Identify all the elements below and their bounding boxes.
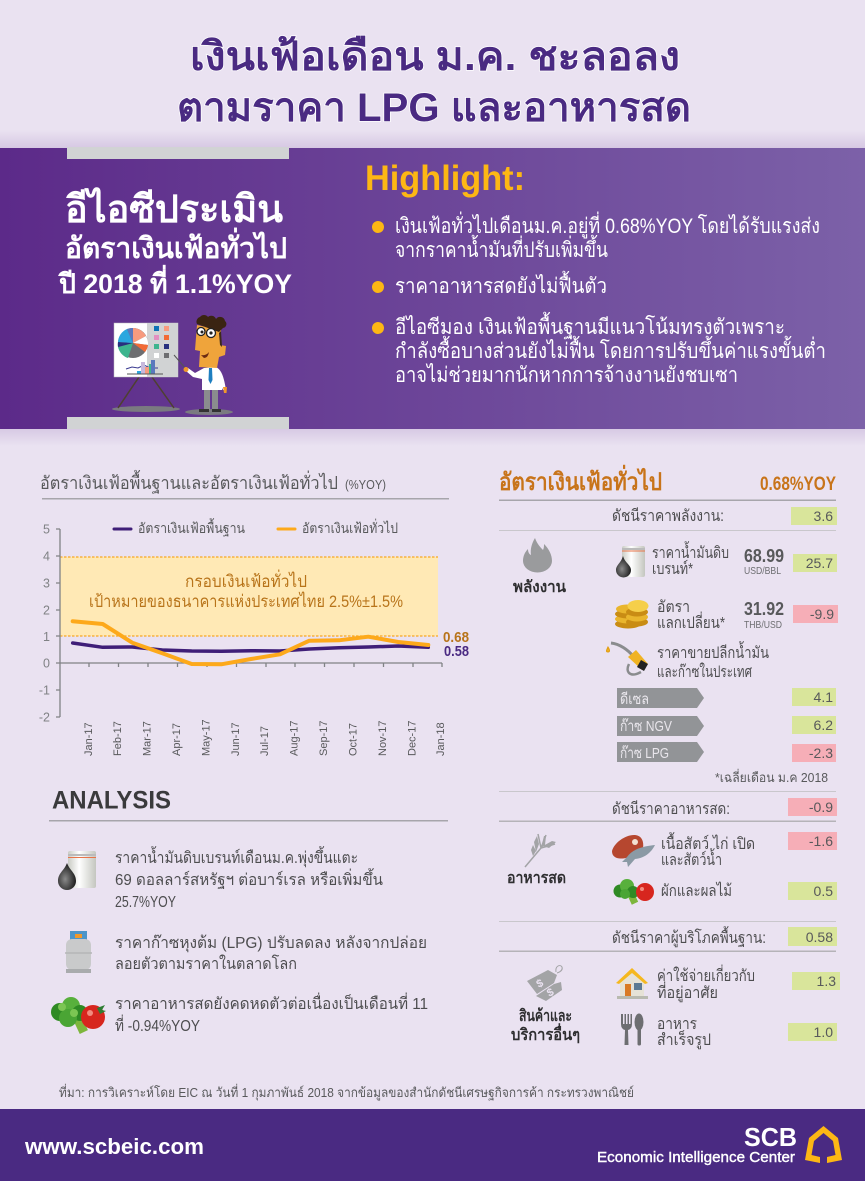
title: ตามราคา LPG และอาหารสด [177, 86, 691, 130]
row: exchange rate: THB/USD [744, 619, 782, 631]
row: prepared food: สำเร็จรูป [657, 1029, 711, 1050]
row: LPG: ก๊าซ LPG [620, 745, 669, 762]
source note: ที่มา: การวิเคราะห์โดย EIC ณ วันที่ 1 กุมภาพันธ์ 2018 จากข้อมูลของสำนักดัชนีเศรษฐกิจการค้า กระทรวงพาณิชย์ [59, 1084, 634, 1101]
row: energy index [612, 507, 837, 525]
row: NGV: ก๊าซ NGV [620, 718, 672, 735]
heading: headline inflation: 0.68%YOY [760, 474, 836, 495]
row: prepared food: 1.0 [814, 1024, 833, 1040]
brand: SCB [744, 1122, 797, 1152]
row: meat: และสัตว์น้ำ [661, 848, 722, 869]
row: core CPI: 0.58 [806, 929, 833, 945]
icon: SCB logo [805, 1126, 842, 1163]
end labels [443, 629, 469, 660]
title [177, 35, 691, 130]
chart axes: 4 [43, 550, 50, 564]
row: brent: 68.99 [744, 546, 784, 566]
chart axes: -1 [39, 684, 50, 698]
heading: EIC forecast: อัตราเงินเฟ้อทั่วไป [65, 227, 287, 265]
row: core CPI: ดัชนีราคาผู้บริโภคพื้นฐาน: [612, 926, 766, 948]
heading: EIC forecast: อีไอซีประเมิน [65, 187, 283, 231]
text: crude oil: ราคาน้ำมันดิบเบรนท์เดือนม.ค.พุ่งขึ้นแตะ [115, 846, 358, 868]
row: exchange rate: -9.9 [810, 606, 834, 622]
row: meat [612, 832, 837, 869]
row: vegetables: 0.5 [814, 883, 833, 899]
text: LPG: ลอยตัวตามราคาในตลาดโลก [115, 954, 297, 973]
chart axes: Oct-17 [348, 723, 360, 756]
end labels: 0.58 [444, 643, 469, 660]
row: brent: USD/BBL [744, 565, 781, 577]
text: fresh food: ที่ -0.94%YOY [115, 1014, 200, 1035]
label: other goods and services: บริการอื่นๆ [511, 1023, 580, 1044]
chart axes: Jan-17 [83, 722, 95, 756]
row: housing [616, 964, 840, 1003]
chart axes: 5 [43, 522, 50, 536]
row: exchange rate: 31.92 [744, 599, 784, 619]
row: core CPI [612, 926, 837, 948]
chart axes: Nov-17 [377, 721, 389, 756]
icon: flame [523, 538, 552, 572]
chart axes: 2 [43, 604, 50, 618]
panel: analysis [49, 786, 448, 1035]
label: energy: พลังงาน [513, 578, 566, 596]
chart heading: อัตราเงินเฟ้อพื้นฐานและอัตราเงินเฟ้อทั่วไป [40, 470, 338, 494]
icon: price tags: $ [545, 986, 556, 1000]
row: diesel: 4.1 [814, 689, 833, 705]
row: brent: 25.7 [806, 555, 833, 571]
icon: wheat [525, 834, 556, 867]
row: housing: 1.3 [817, 973, 836, 989]
inflation target band [60, 557, 438, 636]
icon: oil barrel [58, 851, 96, 890]
text: fresh food [115, 992, 428, 1035]
row: fresh food index: ดัชนีราคาอาหารสด: [612, 800, 730, 818]
footnote: *เฉลี่ยเดือน ม.ค 2018 [715, 769, 828, 785]
row: LPG: -2.3 [809, 745, 833, 761]
chart axes: May-17 [200, 719, 212, 756]
bullet: core inflation: อาจไม่ช่วยมากนักหากการจ้างงานยังชบเซา [395, 363, 738, 387]
chart heading: (%YOY) [345, 478, 386, 492]
row: energy index: ดัชนีราคาพลังงาน: [612, 507, 724, 525]
inflation target band: กรอบเงินเฟ้อทั่วไป [185, 569, 307, 591]
panel: headline inflation breakdown [499, 464, 840, 1050]
text: crude oil: 25.7%YOY [115, 894, 176, 911]
chart axes: 1 [43, 630, 50, 644]
brand [597, 1122, 797, 1166]
row: fresh food index [612, 798, 837, 818]
legend: อัตราเงินเฟ้อทั่วไป [302, 519, 398, 536]
bullet: core inflation [372, 312, 826, 387]
chart axes: Mar-17 [142, 721, 154, 756]
row: exchange rate [615, 599, 838, 632]
footer [0, 1109, 865, 1181]
row: retail fuel: ราคาขายปลีกน้ำมัน [657, 641, 769, 662]
heading: headline inflation [499, 464, 836, 496]
icon: vegetables [51, 997, 106, 1034]
legend [114, 518, 398, 537]
row: housing: ที่อยู่อาศัย [657, 981, 718, 1003]
end labels: 0.68 [443, 629, 469, 646]
icon: price tags: $ [535, 977, 546, 991]
row: vegetables: ผักและผลไม้ [661, 881, 732, 900]
row: energy index: 3.6 [814, 508, 833, 524]
icon: presenter with chart board [112, 315, 233, 415]
brand: Economic Intelligence Center [597, 1149, 795, 1166]
bullet: fresh food: ราคาอาหารสดยังไม่ฟื้นตัว [395, 271, 607, 298]
icon: price tags [527, 966, 562, 1001]
row: fresh food index: -0.9 [809, 799, 833, 815]
row: brent: ราคาน้ำมันดิบ [652, 541, 729, 562]
text: fresh food: ราคาอาหารสดยังคดหดตัวต่อเนื่องเป็นเดือนที่ 11 [115, 992, 428, 1013]
heading: ANALYSIS: ANALYSIS [52, 786, 171, 814]
label: other goods and services: สินค้าและ [519, 1007, 572, 1025]
chart axes: Jan-18 [435, 722, 447, 756]
row: retail fuel: และก๊าซในประเทศ [657, 662, 752, 681]
row: meat: -1.6 [809, 833, 833, 849]
bullet: core inflation: อีไอซีมอง เงินเฟ้อพื้นฐานมีแนวโน้มทรงตัวเพราะ [395, 312, 785, 339]
bullet: headline inflation [372, 211, 820, 262]
chart axes: 3 [43, 576, 50, 590]
line: core inflation [73, 643, 428, 651]
row: LPG [617, 742, 836, 762]
line: headline inflation [73, 621, 428, 664]
heading: Highlight: Highlight: [365, 159, 525, 198]
chart axes: Jun-17 [230, 722, 242, 756]
label: other goods and services [511, 1007, 580, 1044]
row: exchange rate: แลกเปลี่ยน* [657, 611, 725, 632]
row: exchange rate: อัตรา [657, 599, 690, 616]
inflation target band: เป้าหมายของธนาคารแห่งประเทศไทย 2.5%±1.5% [89, 591, 403, 611]
heading: EIC forecast [58, 187, 292, 299]
chart axes: 0 [43, 656, 50, 670]
row: brent [616, 541, 837, 578]
text: crude oil: 69 ดอลลาร์สหรัฐฯ ต่อบาร์เรล หรือเพิ่มขึ้น [115, 868, 383, 889]
text: LPG [115, 933, 427, 973]
chart axes [39, 522, 447, 756]
chart axes: Sep-17 [318, 721, 330, 756]
row: prepared food: อาหาร [657, 1016, 697, 1033]
legend: อัตราเงินเฟ้อพื้นฐาน [138, 518, 245, 537]
panel: highlight banner [0, 147, 865, 429]
row: NGV: 6.2 [814, 717, 833, 733]
row: diesel [617, 688, 836, 708]
row: retail fuel [606, 641, 769, 681]
row: NGV [617, 716, 836, 736]
icon: LPG cylinder [65, 931, 92, 973]
text: LPG: ราคาก๊าซหุงต้ม (LPG) ปรับลดลง หลังจากปล่อย [115, 933, 427, 953]
row: housing: ค่าใช้จ่ายเกี่ยวกับ [657, 964, 755, 985]
heading: headline inflation: อัตราเงินเฟ้อทั่วไป [499, 464, 662, 496]
chart axes: Apr-17 [171, 723, 183, 756]
label: fresh food: อาหารสด [507, 870, 566, 887]
panel: inflation chart [39, 470, 469, 756]
text: crude oil [115, 846, 383, 911]
row: brent: เบรนท์* [652, 559, 693, 578]
chart axes: Feb-17 [112, 721, 124, 756]
chart axes: Jul-17 [259, 726, 271, 756]
row: diesel: ดีเซล [620, 691, 649, 708]
row: prepared food [621, 1014, 837, 1050]
row: meat: เนื้อสัตว์ ไก่ เปิด [661, 832, 755, 853]
chart axes: -2 [39, 710, 50, 724]
heading: EIC forecast: ปี 2018 ที่ 1.1%YOY [58, 264, 292, 299]
row: vegetables [614, 879, 837, 905]
title: เงินเฟ้อเดือน ม.ค. ชะลอลง [190, 35, 680, 79]
chart axes: Aug-17 [288, 721, 300, 756]
website: www.scbeic.com [24, 1134, 204, 1159]
bullet: headline inflation: จากราคาน้ำมันที่ปรับเพิ่มขึ้น [395, 235, 608, 262]
chart axes: Dec-17 [406, 721, 418, 756]
